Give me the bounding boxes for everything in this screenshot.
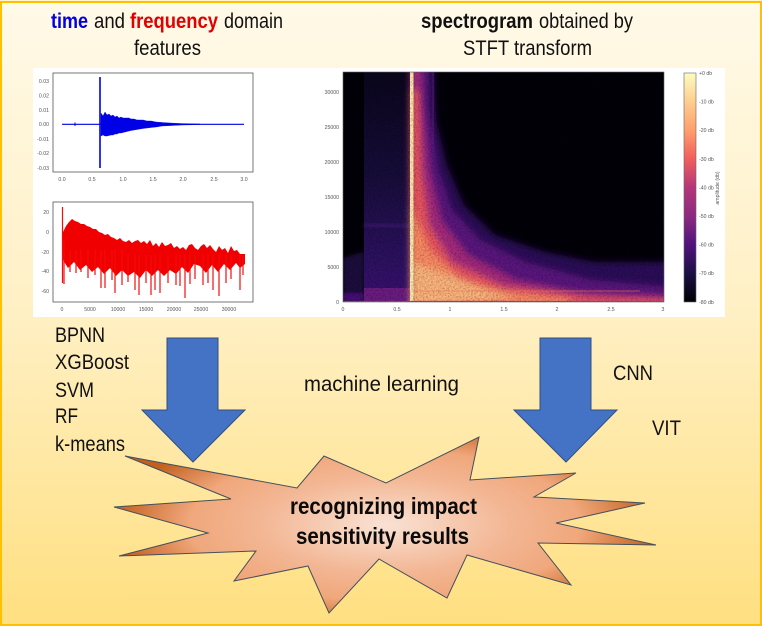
x axis ticks: 15000: [139, 307, 153, 313]
heading: time and frequency domain features: frequency: [130, 10, 218, 33]
x axis ticks: 20000: [167, 307, 181, 313]
label: VIT: VIT: [652, 417, 681, 440]
colorbar labels: -50 db: [699, 214, 714, 220]
y axis ticks: -60: [42, 289, 49, 295]
x axis ticks: 30000: [222, 307, 236, 313]
x axis ticks: 1.0: [119, 177, 127, 183]
x axis ticks: 25000: [194, 307, 208, 313]
y axis ticks: -0.01: [37, 137, 49, 143]
y axis ticks: 20: [43, 210, 49, 216]
x axis ticks: 2.5: [607, 307, 615, 313]
result text: recognizing impact: [290, 493, 477, 519]
x axis ticks: 1.5: [500, 307, 508, 313]
colorbar labels: -60 db: [699, 242, 714, 248]
heading: spectrogram obtained by STFT transform: obtained by: [539, 10, 633, 33]
label: CNN: CNN: [613, 362, 653, 385]
x axis ticks: [58, 177, 248, 183]
x axis ticks: 1.5: [149, 177, 157, 183]
y axis ticks: 20000: [325, 160, 339, 166]
heading: time and frequency domain features: and: [94, 10, 125, 33]
colorbar labels: [699, 71, 721, 306]
x axis ticks: 10000: [111, 307, 125, 313]
y axis ticks: 10000: [325, 230, 339, 236]
y axis ticks: 5000: [327, 265, 339, 271]
x axis ticks: 0.5: [393, 307, 401, 313]
list: classical machine learning models: SVM: [55, 379, 94, 402]
x axis ticks: 2.5: [210, 177, 218, 183]
heading: time and frequency domain features: features: [134, 37, 201, 60]
y axis ticks: 0.02: [39, 94, 49, 100]
colorbar labels: -10 db: [699, 100, 714, 106]
x axis ticks: 0: [61, 307, 64, 313]
y axis ticks: [37, 79, 49, 172]
y axis ticks: -0.03: [37, 166, 49, 172]
list: classical machine learning models: RF: [55, 405, 78, 428]
x axis ticks: 0.0: [58, 177, 66, 183]
result text: sensitivity results: [296, 523, 469, 549]
result text: [290, 493, 477, 549]
y axis ticks: -0.02: [37, 151, 49, 157]
y axis ticks: -20: [42, 250, 49, 256]
x axis ticks: [342, 307, 665, 313]
list: classical machine learning models: XGBoost: [55, 351, 129, 374]
list: classical machine learning models: [55, 324, 129, 456]
colorbar labels: -70 db: [699, 271, 714, 277]
heading: spectrogram obtained by STFT transform: spectrogram: [421, 10, 533, 33]
y axis ticks: [325, 90, 339, 306]
arrow: right down arrow: [514, 338, 617, 462]
y axis ticks: 0: [336, 300, 339, 306]
heading: time and frequency domain features: time: [51, 10, 88, 33]
colorbar labels: -80 db: [699, 300, 714, 306]
y axis ticks: 15000: [325, 195, 339, 201]
white figure panel: [33, 68, 725, 317]
chart: spectrogram: [325, 60, 680, 313]
colorbar labels: amplitude (db): [715, 171, 721, 205]
waveform trace: [62, 77, 244, 168]
spectrum trace: [62, 207, 245, 298]
arrow: left down arrow: [142, 338, 245, 462]
starburst: recognizing impact sensitivity results: [114, 437, 656, 613]
heading: time and frequency domain features: domain: [224, 10, 283, 33]
spectrogram image: [343, 72, 664, 302]
x axis ticks: 2: [556, 307, 559, 313]
list: classical machine learning models: k-means: [55, 433, 125, 456]
x axis ticks: 1: [449, 307, 452, 313]
colorbar labels: +0 db: [699, 71, 712, 77]
x axis ticks: 3.0: [240, 177, 248, 183]
x axis ticks: 5000: [84, 307, 96, 313]
list: classical machine learning models: BPNN: [55, 324, 105, 347]
y axis ticks: -40: [42, 269, 49, 275]
colorbar labels: -20 db: [699, 128, 714, 134]
chart: frequency domain spectrum: [42, 202, 253, 313]
x axis ticks: 0: [342, 307, 345, 313]
colorbar labels: -40 db: [699, 186, 714, 192]
x axis ticks: 3: [662, 307, 665, 313]
chart: time domain waveform: [37, 73, 253, 183]
heading: spectrogram obtained by STFT transform: STFT transform: [463, 37, 592, 60]
x axis ticks: 2.0: [179, 177, 187, 183]
colorbar labels: -30 db: [699, 157, 714, 163]
x axis ticks: [61, 307, 236, 313]
y axis ticks: 0.00: [39, 122, 49, 128]
y axis ticks: 0.01: [39, 108, 49, 114]
colorbar: [684, 71, 721, 306]
label: machine learning: machine learning: [304, 373, 459, 396]
y axis ticks: 0: [46, 230, 49, 236]
y axis ticks: 0.03: [39, 79, 49, 85]
y axis ticks: 30000: [325, 90, 339, 96]
y axis ticks: [42, 210, 49, 295]
y axis ticks: 25000: [325, 125, 339, 131]
heading: spectrogram obtained by STFT transform: [421, 10, 633, 60]
x axis ticks: 0.5: [88, 177, 96, 183]
heading: time and frequency domain features: [51, 10, 283, 60]
